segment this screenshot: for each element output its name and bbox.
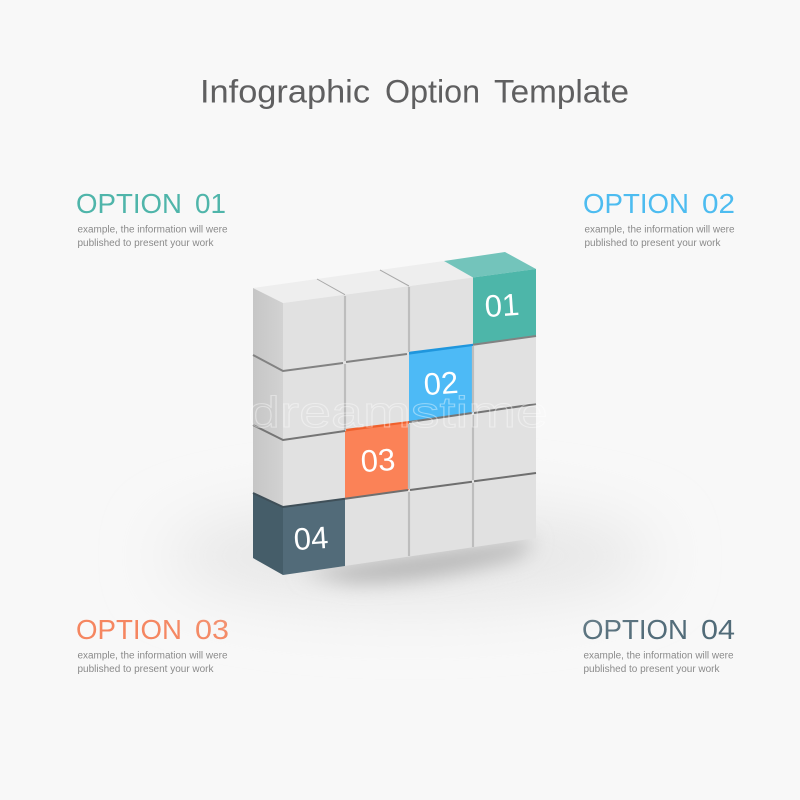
watermark: dreamstime [248, 388, 548, 437]
option 02 text block: example, the information will were [584, 224, 735, 236]
option 03 text block [76, 614, 229, 675]
title: Option [385, 74, 480, 110]
option 01 text block: example, the information will were [78, 224, 228, 236]
top faces [253, 261, 473, 303]
front faces [283, 269, 536, 575]
option 01 text block [76, 188, 228, 249]
left side faces [253, 288, 283, 507]
option 04 text block: OPTION [582, 614, 688, 645]
option 03 text block: OPTION [76, 614, 182, 645]
title [200, 74, 629, 110]
option 04 text block: 04 [701, 614, 735, 645]
cell 04: dark slate cube [253, 493, 345, 575]
option 03 text block: published to present your work [78, 664, 214, 675]
option 01 text block: published to present your work [78, 238, 214, 249]
title: Infographic [200, 74, 370, 110]
cell 01: teal cube: 01 [484, 287, 520, 324]
cube wall [253, 252, 536, 575]
cube shadow [165, 508, 655, 604]
option 01 text block: 01 [195, 188, 226, 219]
title: Template [494, 74, 629, 110]
option 04 text block: published to present your work [584, 664, 720, 675]
option 03 text block: example, the information will were [78, 650, 228, 662]
cell 02: blue: 02 [423, 365, 459, 402]
option 02 text block: published to present your work [584, 238, 721, 249]
option 03 text block: 03 [195, 614, 229, 645]
cell 02: blue [409, 344, 473, 422]
option 04 text block [582, 614, 735, 675]
cell 03: orange [345, 421, 409, 499]
cell 01: teal cube [444, 252, 536, 345]
option 04 text block: example, the information will were [584, 650, 734, 662]
row and column grooves [253, 270, 536, 556]
option 02 text block [583, 188, 735, 249]
cell 03: orange: 03 [360, 442, 396, 479]
option 02 text block: 02 [702, 188, 735, 219]
cell 04: dark slate cube: 04 [293, 520, 329, 557]
option 01 text block: OPTION [76, 188, 182, 219]
option 02 text block: OPTION [583, 188, 689, 219]
